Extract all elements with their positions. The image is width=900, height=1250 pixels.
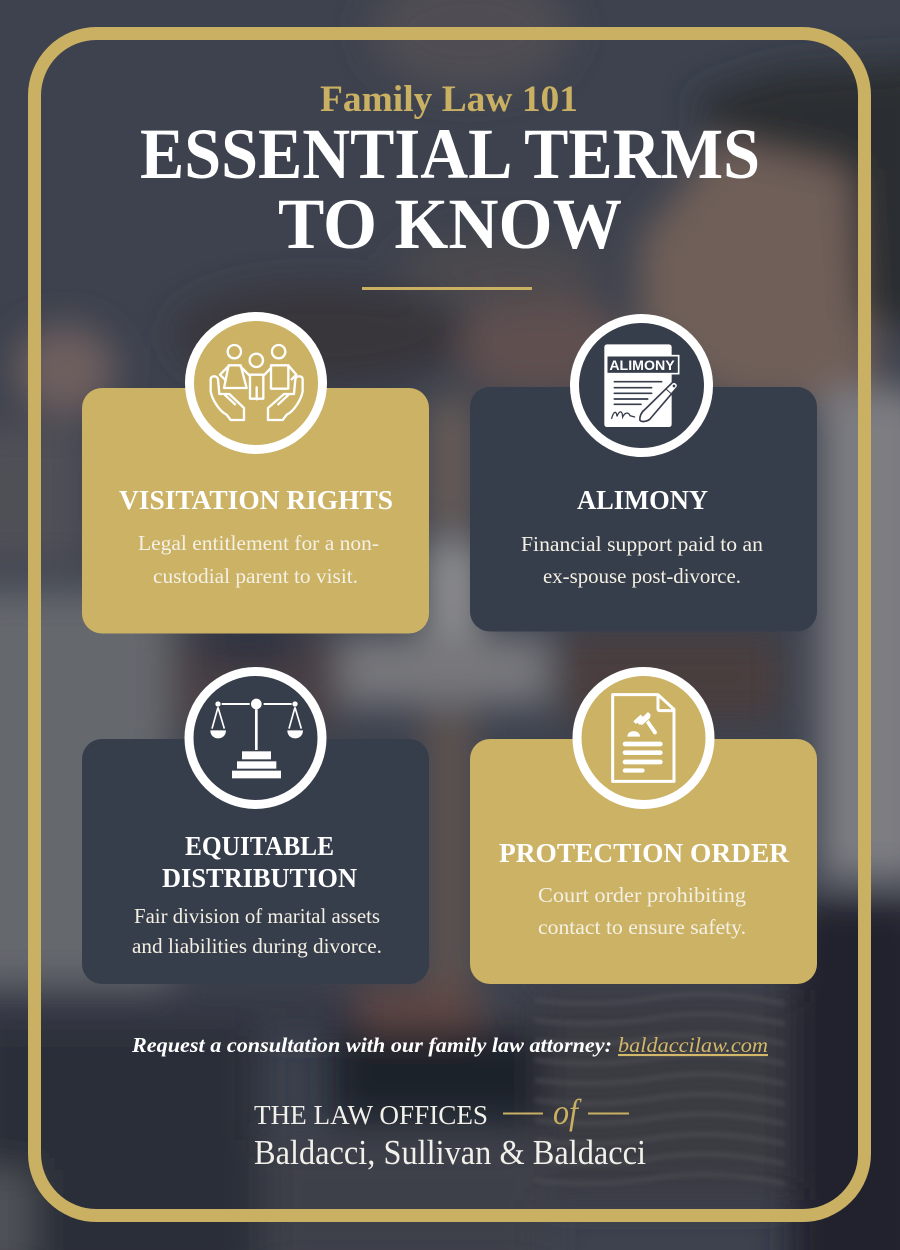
link: website: baldaccilaw.com	[618, 1033, 768, 1057]
icon: family in hands	[190, 316, 322, 450]
heading: equitable distribution: EQUITABLE	[185, 831, 334, 861]
text: alimony description	[521, 532, 764, 588]
text: alimony description: ex-spouse post-divorce.	[543, 564, 741, 588]
panel: alimony	[470, 318, 817, 632]
icon: scales of justice	[189, 672, 322, 804]
heading: equitable distribution: DISTRIBUTION	[162, 863, 357, 893]
text: visitation rights description: custodial parent to visit.	[153, 564, 358, 588]
panel: equitable distribution	[82, 672, 429, 984]
panel: visitation rights	[82, 316, 429, 634]
text: visitation rights description	[138, 531, 379, 588]
panel: protection order	[470, 672, 817, 984]
text: protection order description	[538, 883, 747, 939]
shirt stripes	[535, 994, 785, 1184]
logo: law offices: Baldacci, Sullivan & Baldacci	[254, 1133, 646, 1172]
main heading: ESSENTIAL TERMS	[140, 114, 760, 194]
heading: protection order: PROTECTION ORDER	[499, 838, 790, 868]
main heading	[140, 114, 760, 264]
main heading: TO KNOW	[278, 184, 622, 264]
icon: court order document	[577, 672, 710, 804]
logo: law offices: of	[553, 1092, 582, 1132]
call to action: Request a consultation with our family law attorney:	[131, 1033, 612, 1057]
text: alimony description: Financial support paid to an	[521, 532, 764, 556]
text: equitable distribution description: and liabilities during divorce.	[132, 934, 382, 958]
eyebrow heading: Family Law 101	[320, 79, 578, 120]
title block	[140, 79, 760, 264]
icon: alimony document	[574, 318, 708, 452]
text: protection order description: contact to ensure safety.	[538, 915, 746, 939]
text: protection order description: Court order prohibiting	[538, 883, 747, 907]
text: equitable distribution description	[132, 904, 382, 958]
heading: equitable distribution	[162, 831, 357, 893]
title divider	[362, 287, 532, 290]
text: equitable distribution description: Fair division of marital assets	[134, 904, 380, 928]
heading: alimony: ALIMONY	[577, 485, 708, 515]
logo: law offices	[254, 1092, 646, 1172]
icon: alimony document: ALIMONY	[609, 358, 675, 373]
heading: visitation rights: VISITATION RIGHTS	[119, 485, 393, 515]
logo: law offices: THE LAW OFFICES	[254, 1100, 488, 1130]
text: visitation rights description: Legal entitlement for a non-	[138, 531, 379, 555]
